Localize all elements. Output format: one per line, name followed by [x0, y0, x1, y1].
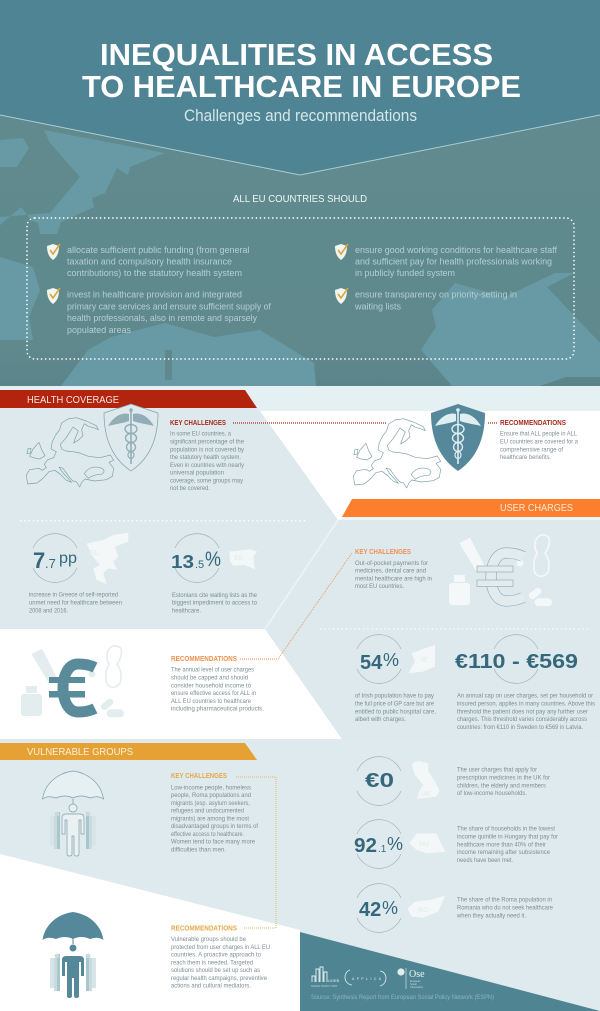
stat: 13.5% Estonia: EE [234, 555, 244, 562]
text: health coverage recommendations [500, 418, 578, 461]
stat: 54% Ireland: albeit with charges. [355, 716, 406, 723]
text: user charges recommendations: ALL EU countries to healthcare [171, 698, 251, 705]
stat: 54% Ireland: 54 [360, 652, 383, 674]
stat: 13.5% Estonia: biggest impediment to access to [172, 600, 257, 607]
text: vulnerable groups recommendations: reach them is needed. Targeted [171, 959, 253, 966]
text: vulnerable groups recommendations [171, 924, 270, 990]
text: vulnerable groups key challenges: Women tend to face many more [171, 838, 255, 846]
item: good working conditions: ensure good working conditions for healthcare staff [355, 245, 557, 255]
stat: 13.5% Estonia: % [205, 548, 221, 571]
stat: 7.7pp Greece: 7 [33, 548, 45, 573]
stat: 13.5% Estonia: Estonians cite waiting lists as the [172, 592, 257, 599]
icon: filled umbrella with people [42, 912, 104, 998]
item: transparency on priority-setting: waiting lists [354, 302, 401, 312]
item: good working conditions: and sufficient pay for health professionals working [355, 256, 552, 266]
text: user charges recommendations [171, 654, 264, 713]
panel: footer [300, 932, 600, 1011]
text: vulnerable groups key challenges: people, Roma populations and [171, 792, 251, 799]
banner: user charges [342, 499, 600, 517]
stat: 13.5% Estonia: .5 [195, 559, 204, 571]
stat: 7.7pp Greece: EL [90, 550, 100, 557]
stat: 92.1% Hungary: income quintile in Hungary that pay for [457, 834, 559, 840]
text: health coverage key challenges [170, 418, 245, 492]
text: health coverage key challenges: Even in countries with nearly [170, 462, 245, 469]
text: vulnerable groups recommendations: actions and cultural mediators. [171, 982, 251, 990]
logo: OSE [397, 968, 425, 989]
stat: 54% Ireland: entitled to public hospital care, [355, 708, 436, 715]
logo: Applica: APPLICA [352, 977, 382, 981]
connector: vulnerable groups dotted line [236, 777, 276, 928]
stat: 92.1% Hungary: % [387, 834, 403, 854]
text: vulnerable groups key challenges: migrants (esp. asylum seekers, [171, 800, 250, 807]
title: TO HEALTHCARE IN EUROPE [82, 69, 521, 104]
banner: vulnerable groups [0, 743, 257, 760]
item: invest in healthcare provision: health professionals, also in remote and sparsely [67, 313, 257, 323]
stat: 92.1% Hungary: 92 [354, 835, 377, 857]
stat: 42% Romania: RO [418, 907, 429, 914]
logo: OSE: Observatory [410, 986, 424, 989]
text: vulnerable groups recommendations: solutions should be set up such as [171, 967, 261, 974]
banner: health coverage [0, 390, 257, 408]
stat: 54% Ireland: of Irish population have to pay [355, 693, 435, 700]
text: vulnerable groups key challenges: refugees and undocumented [171, 808, 244, 814]
stat: 7.7pp Greece: 2008 and 2016. [29, 608, 68, 614]
text: user charges key challenges: Out-of-pocket payments for [355, 560, 429, 567]
text: user charges recommendations: consider household income to [171, 682, 251, 689]
stat: 54% Ireland: IE [421, 657, 428, 664]
text: vulnerable groups key challenges: migrants) are among the most [171, 815, 249, 822]
text: user charges recommendations: RECOMMENDATIONS [171, 654, 237, 663]
stat: 110 to 569 euro [455, 635, 596, 731]
panel: section backgrounds [0, 386, 600, 1011]
logo: Applica [345, 970, 386, 986]
item: invest in healthcare provision: populated areas [67, 325, 131, 335]
logo: university bars: SOCIAL POLICY UNIT [311, 984, 338, 988]
title: INEQUALITIES IN ACCESS [100, 37, 493, 72]
logo: university bars: UOEB [328, 978, 340, 983]
text: health coverage recommendations: comprehensive range of [500, 446, 563, 453]
icon: outlined euro with medical items [449, 535, 552, 606]
text: user charges recommendations: ensure effective access for ALL in [171, 690, 256, 697]
text: user charges recommendations: including pharmaceutical products. [171, 706, 264, 713]
banner: vulnerable groups: VULNERABLE GROUPS [27, 746, 133, 758]
text: user charges recommendations: should be capped and should [171, 674, 248, 682]
item: good working conditions [335, 244, 557, 278]
stat: 0 euro UK: The user charges that apply for [457, 767, 538, 774]
stat: 0 euro UK: of low-income households. [457, 790, 527, 797]
stat: 92.1% Hungary: healthcare more than 40% of their [457, 841, 547, 848]
item: invest in healthcare provision: primary care services and ensure sufficient supply of [67, 302, 271, 312]
connector: user charges dotted line [240, 553, 352, 659]
text: vulnerable groups recommendations: RECOMMENDATIONS [171, 924, 237, 933]
icon: outlined umbrella with people [42, 771, 104, 856]
item: invest in healthcare provision: invest in healthcare provision and integrated [67, 290, 242, 300]
text: health coverage recommendations: EU countries are covered for a [500, 438, 578, 446]
logo: OSE: European [410, 980, 421, 983]
stat: 7.7pp Greece: unmet need for healthcare between [29, 600, 122, 606]
text: vulnerable groups recommendations: regular health campaigns, preventive [171, 975, 267, 982]
stat: 42% Romania: when they actually need it. [456, 912, 526, 919]
item: allocate public funding: allocate sufficient public funding (from general [67, 245, 250, 255]
text: health coverage key challenges: In some EU countries, a [170, 431, 231, 438]
stat: 0 euro UK: prescription medicines in the UK for [457, 774, 551, 782]
stat: 7.7pp Greece: .7 [45, 556, 56, 571]
stat: 0 euro UK: UK [421, 791, 431, 798]
stat: 0 euro UK: children, the elderly and members [457, 782, 547, 789]
icon: Europe map outline with shield [26, 404, 158, 487]
banner: health coverage: HEALTH COVERAGE [27, 394, 119, 406]
stat: 92.1% Hungary: .1 [378, 844, 387, 855]
stat: 54% Ireland: % [383, 650, 399, 670]
text: health coverage recommendations: RECOMMENDATIONS [500, 418, 566, 427]
icon: Europe map outline with filled shield [353, 404, 485, 488]
item: invest in healthcare provision [47, 288, 271, 335]
stat: 54% Ireland [355, 635, 436, 723]
stat: 42% Romania: 42 [359, 899, 381, 921]
logo: OSE: Ose [409, 969, 425, 980]
subtitle: Challenges and recommendations [184, 106, 417, 125]
divider: dotted [20, 520, 307, 522]
text: health coverage key challenges: population is not covered by [170, 446, 245, 453]
item: allocate public funding: taxation and compulsory health insurance [67, 256, 232, 266]
text: health coverage key challenges: KEY CHALLENGES [170, 418, 226, 427]
stat: 42% Romania: Romania who do not seek healthcare [457, 904, 553, 912]
item: allocate public funding [47, 244, 250, 278]
divider: dotted [320, 628, 588, 630]
text: vulnerable groups key challenges: disadvantaged groups in terms of [171, 823, 258, 830]
stat: 42% Romania: The share of the Roma population in [457, 897, 552, 904]
item: transparency on priority-setting: ensure transparency on priority-setting in [355, 290, 517, 300]
text: vulnerable groups key challenges: Low-income people, homeless [171, 784, 252, 791]
stat: 92.1% Hungary [354, 820, 559, 868]
text: source: Source: Synthesis Report from European Social Policy Network (ESPN) [311, 994, 494, 1001]
text: vulnerable groups recommendations: Vulnerable groups should be [171, 936, 246, 943]
stat: 13.5% Estonia: 13 [171, 552, 194, 572]
text: health coverage recommendations: Ensure that ALL people in ALL [500, 431, 577, 438]
stat: 0 euro UK [357, 757, 551, 805]
text: health coverage key challenges: the statutory health system. [170, 454, 241, 461]
stat: 92.1% Hungary: needs have been met. [457, 857, 513, 864]
text: user charges key challenges: KEY CHALLENGES [355, 547, 411, 556]
text: health coverage key challenges: universal population [170, 470, 224, 477]
text: health coverage key challenges: coverage, some groups may [170, 477, 244, 484]
panel: header with map background [0, 0, 600, 386]
connector: health coverage dotted line [233, 422, 497, 424]
text: health coverage key challenges: significant percentage of the [170, 438, 244, 446]
stat: 92.1% Hungary: income remaining after subsistence [457, 849, 550, 856]
text: user charges recommendations: The annual level of user charges [171, 667, 254, 674]
text: health coverage key challenges: not be covered. [170, 485, 210, 492]
stat: 13.5% Estonia: healthcare. [172, 608, 201, 614]
logo: OSE: Social [410, 983, 417, 986]
icon: teal euro with medical items [21, 646, 124, 717]
chevron banner [0, 0, 600, 175]
stat: 0 euro UK: €0 [365, 770, 394, 792]
stat: 92.1% Hungary: The share of households in the lowest [457, 826, 555, 833]
stat: 54% Ireland: the full price of GP care but are [355, 700, 434, 708]
stat: 7.7pp Greece: increase in Greece of self-reported [29, 592, 118, 599]
stat: 92.1% Hungary: HU [419, 841, 429, 848]
banner: user charges: USER CHARGES [500, 502, 573, 514]
stat: 42% Romania [357, 884, 553, 932]
text: vulnerable groups key challenges [171, 771, 258, 853]
text: vulnerable groups key challenges: effective access to healthcare. [171, 831, 244, 838]
text: user charges key challenges: medicines, dental care and [355, 568, 426, 575]
text: user charges key challenges: mental healthcare are high in [355, 576, 432, 582]
text: vulnerable groups recommendations: countries. A proactive approach to [171, 952, 261, 958]
stat: 42% Romania: % [382, 898, 398, 918]
item: transparency on priority-setting [335, 288, 517, 312]
panel: dotted recommendations box [27, 218, 574, 359]
text: user charges key challenges: most EU countries. [355, 583, 404, 590]
heading: all EU countries should: ALL EU COUNTRIES SHOULD [233, 194, 367, 205]
item: allocate public funding: contributions) to the statutory health system [67, 268, 242, 278]
logo: university bars [311, 967, 340, 988]
title [82, 37, 521, 104]
text: vulnerable groups recommendations: protected from user charges in ALL EU [171, 944, 270, 951]
stat: 7.7pp Greece [29, 533, 128, 614]
stat: 13.5% Estonia [171, 534, 257, 614]
item: good working conditions: in publicly funded system [355, 268, 455, 278]
text: vulnerable groups key challenges: difficulties than men. [171, 846, 226, 853]
stat: 7.7pp Greece: pp [59, 550, 77, 567]
text: user charges key challenges [355, 547, 432, 590]
text: health coverage recommendations: healthcare benefits. [500, 454, 551, 461]
stat: 110 to 569 euro: €110 - €569 [455, 651, 578, 673]
text: vulnerable groups key challenges: KEY CHALLENGES [171, 771, 227, 780]
